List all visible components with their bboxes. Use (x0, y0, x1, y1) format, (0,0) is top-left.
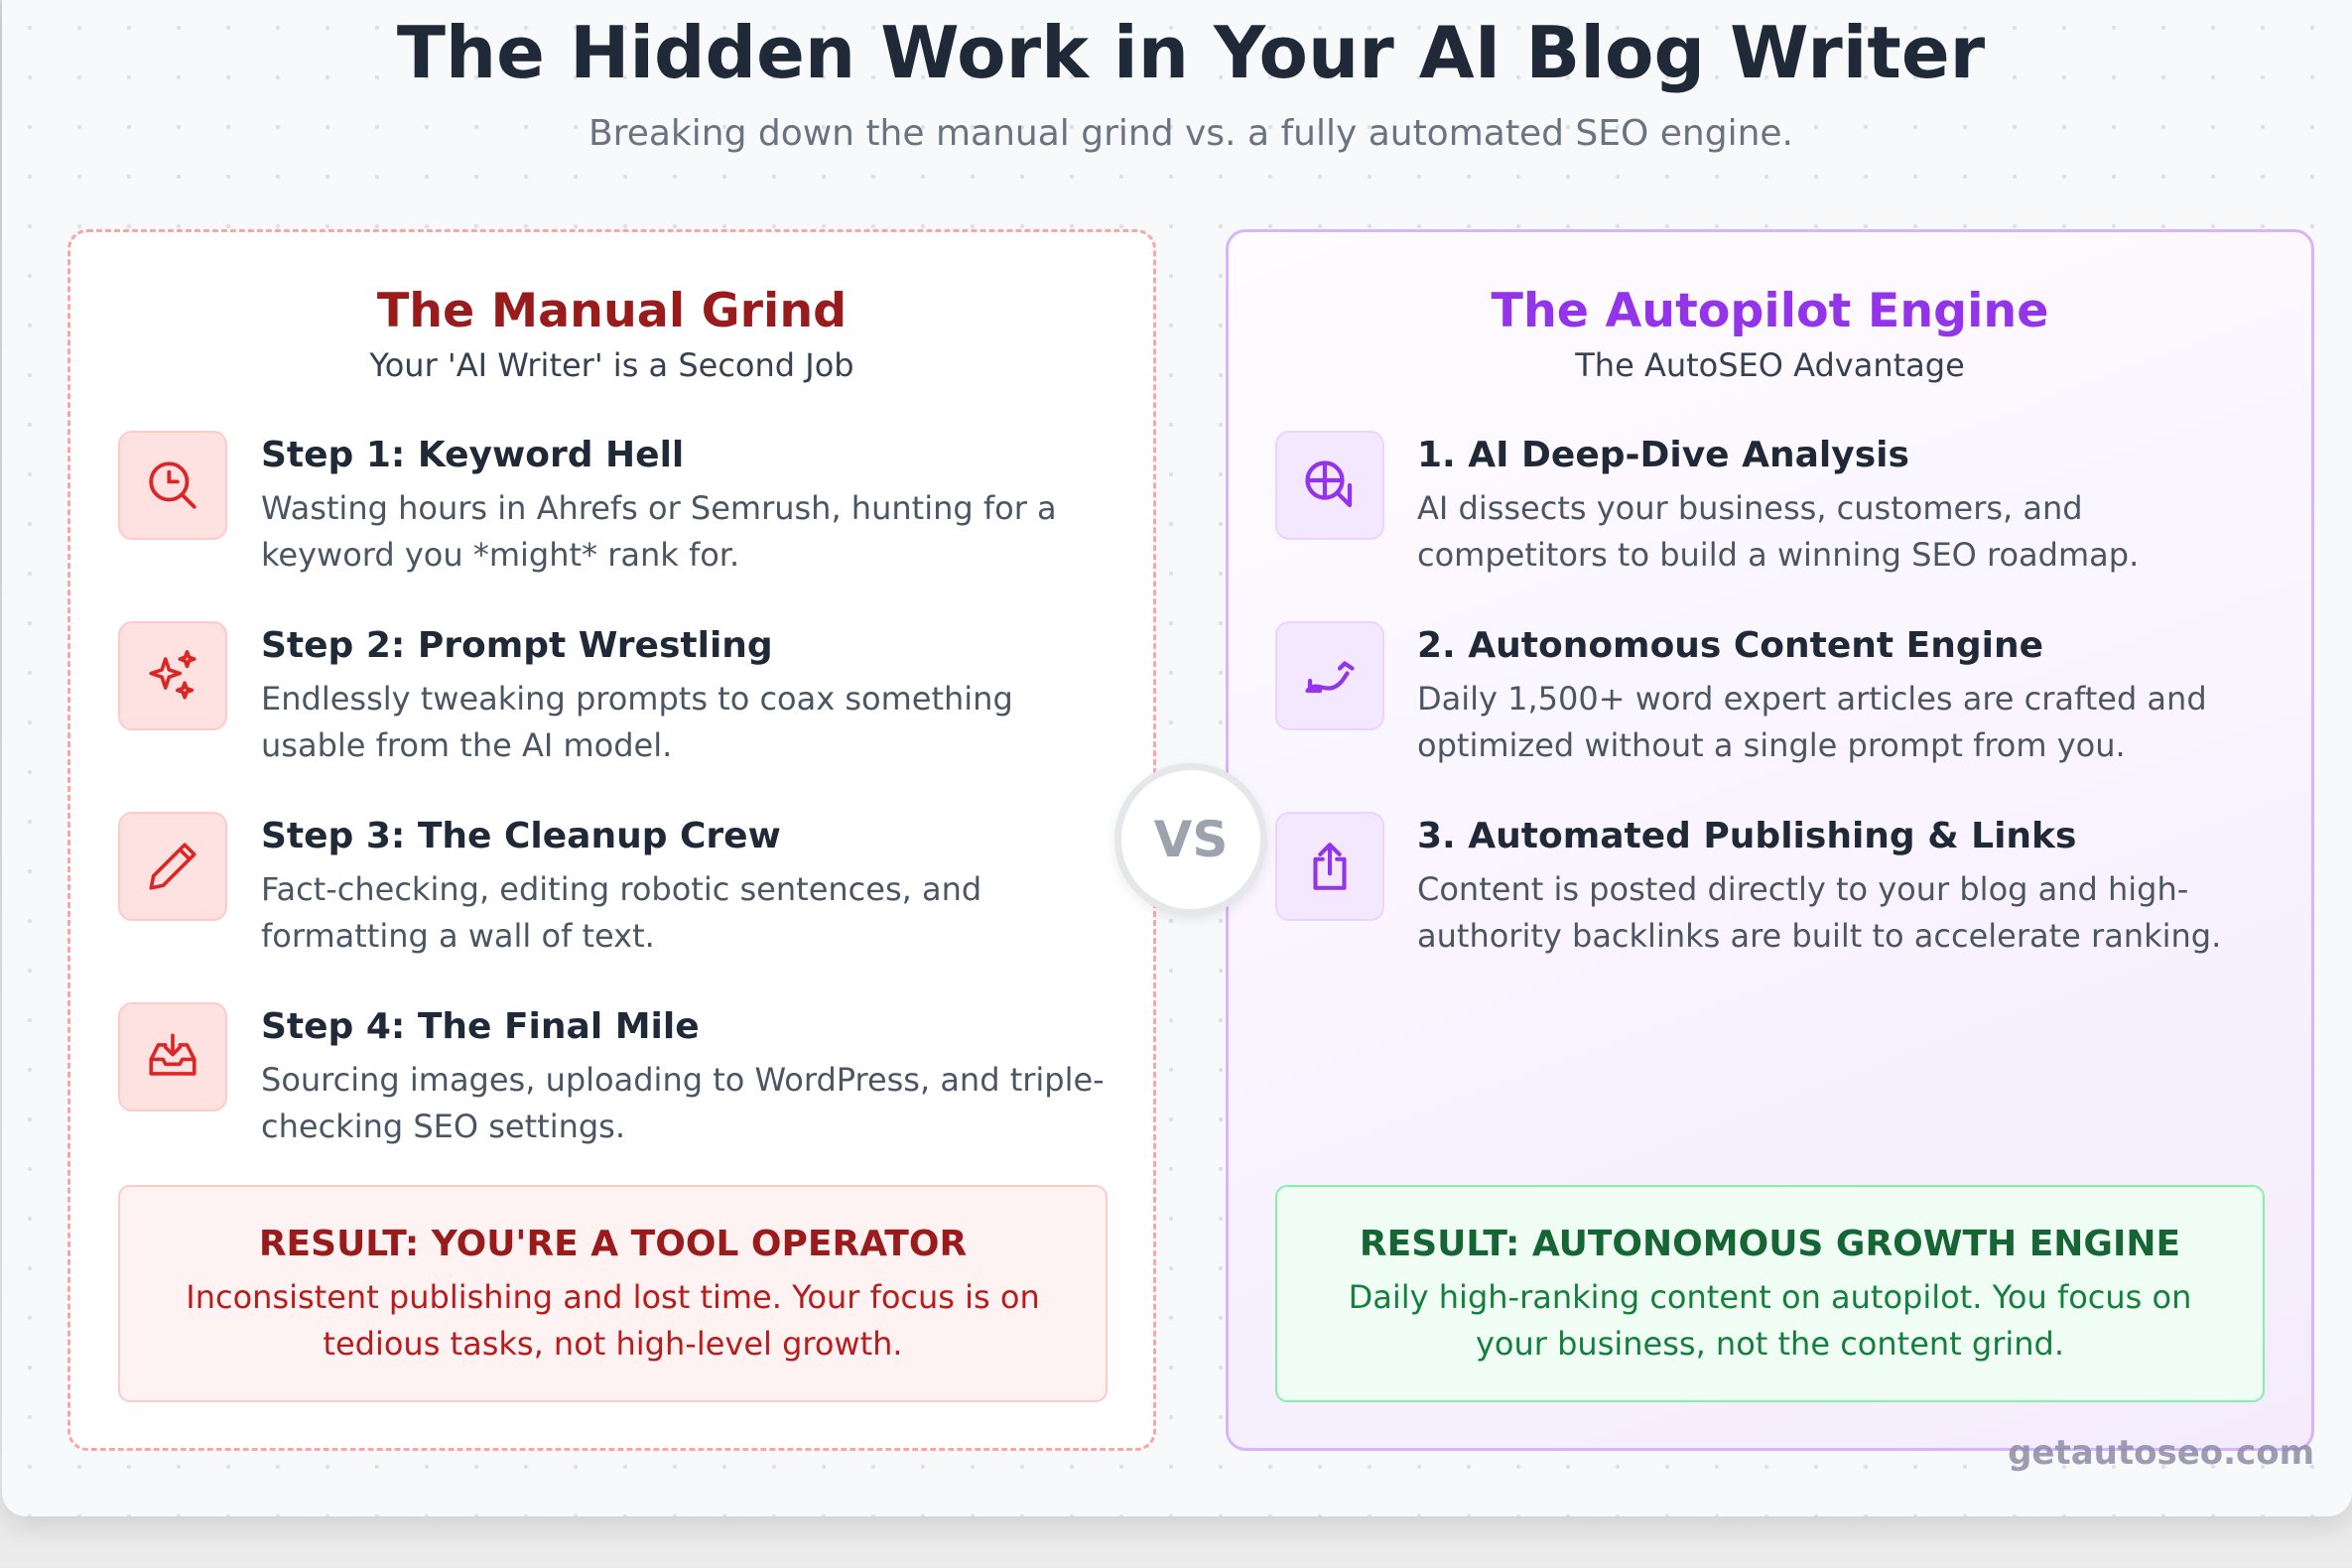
panel: manual grind (67, 229, 1156, 1451)
heading: autopilot: The Autopilot Engine (1492, 284, 2048, 338)
step 2 (118, 621, 1013, 764)
text: publishing: 3. Automated Publishing & Links (1417, 816, 2076, 856)
result: growth engine (1275, 1185, 2265, 1402)
text: step 1: Wasting hours in Ahrefs or Semrush, hunting for a keyword you *might* rank for. (261, 489, 1057, 574)
step 1 (118, 431, 1057, 574)
text: step 3: Step 3: The Cleanup Crew (261, 816, 781, 856)
text: AI deep-dive: 1. AI Deep-Dive Analysis (1417, 435, 1909, 475)
text: step 3: Fact-checking, editing robotic sentences, and formatting a wall of text. (261, 870, 981, 955)
icon: search clock (118, 431, 227, 540)
step A3 (1275, 812, 2221, 955)
text: step 3 (261, 816, 981, 955)
text: step 4: Sourcing images, uploading to WordPress, and triple-checking SEO settings. (261, 1061, 1105, 1145)
VS badge (1114, 763, 1267, 916)
step A2 (1275, 621, 2207, 764)
text: AI deep-dive (1417, 435, 2139, 574)
text: publishing: Content is posted directly to your blog and high-authority backlinks are built to accelerate ranking. (1417, 870, 2221, 955)
result: tool operator (118, 1185, 1108, 1402)
text: step 1: Step 1: Keyword Hell (261, 435, 684, 475)
panel: autopilot engine (1226, 229, 2314, 1451)
result: growth engine: your business, not the content grind. (1476, 1325, 2064, 1363)
subheading: autopilot: The AutoSEO Advantage (1575, 346, 1965, 384)
result: tool operator: Inconsistent publishing and lost time. Your focus is on (186, 1278, 1040, 1316)
step A1 (1275, 431, 2139, 574)
text: step 4: Step 4: The Final Mile (261, 1006, 700, 1047)
icon: share upload (1275, 812, 1384, 921)
result: tool operator: tedious tasks, not high-level growth. (323, 1325, 903, 1363)
text: step 2: Step 2: Prompt Wrestling (261, 625, 773, 666)
result: tool operator: RESULT: YOU'RE A TOOL OPERATOR (259, 1224, 967, 1264)
title: The Hidden Work in Your AI Blog Writer (397, 11, 1985, 94)
text: AI deep-dive: AI dissects your business, customers, and competitors to build a winning SEO roadmap. (1417, 489, 2139, 574)
step 4 (118, 1002, 1105, 1145)
text: step 4 (261, 1006, 1105, 1145)
text: step 1 (261, 435, 1057, 574)
VS badge: VS (1154, 811, 1228, 868)
icon: pencil (118, 812, 227, 921)
icon: sparkles (118, 621, 227, 730)
text: content engine: Daily 1,500+ word expert articles are crafted and optimized without a single prompt from you. (1417, 680, 2207, 764)
text: content engine: 2. Autonomous Content Engine (1417, 625, 2043, 666)
text: publishing (1417, 816, 2221, 955)
icon: inbox download (118, 1002, 227, 1111)
heading: manual grind: The Manual Grind (377, 284, 847, 338)
text: content engine (1417, 625, 2207, 764)
result: growth engine: RESULT: AUTONOMOUS GROWTH ENGINE (1360, 1224, 2180, 1264)
watermark: getautoseo.com (2008, 1433, 2314, 1473)
subtitle: Breaking down the manual grind vs. a fully automated SEO engine. (588, 113, 1793, 154)
icon: globe search (1275, 431, 1384, 540)
text: step 2 (261, 625, 1013, 764)
step 3 (118, 812, 981, 955)
text: step 2: Endlessly tweaking prompts to coax something usable from the AI model. (261, 680, 1013, 764)
icon: wave arrow (1275, 621, 1384, 730)
subheading: manual: Your 'AI Writer' is a Second Job (369, 346, 854, 384)
result: growth engine: Daily high-ranking content on autopilot. You focus on (1349, 1278, 2191, 1316)
